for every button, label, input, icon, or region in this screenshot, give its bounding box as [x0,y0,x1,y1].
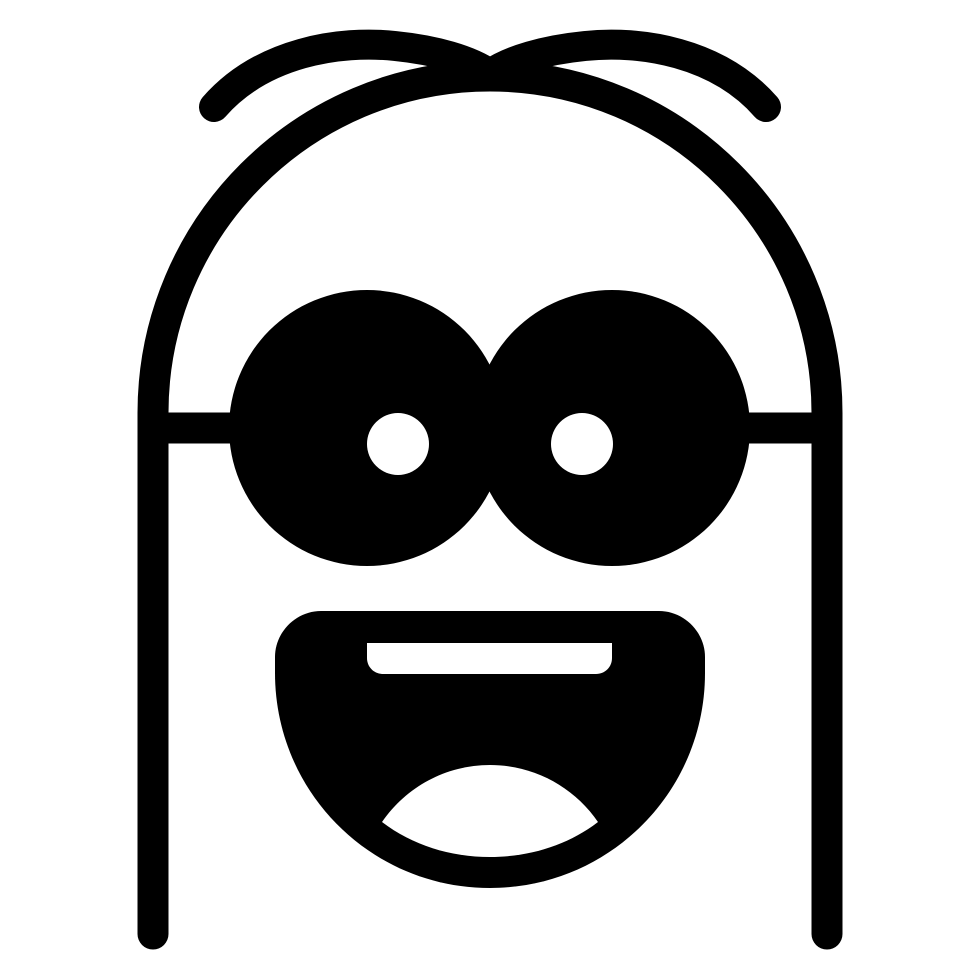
head outline [153,76,827,934]
goggles [229,290,750,566]
goggle strap [153,412,827,444]
mouth shape [275,611,705,888]
hair strands [214,45,766,107]
left lens [229,290,505,566]
teeth [367,643,612,674]
mouth [275,611,705,888]
right lens [474,290,750,566]
tongue [382,765,598,857]
left pupil [367,413,429,475]
right pupil [551,413,613,475]
